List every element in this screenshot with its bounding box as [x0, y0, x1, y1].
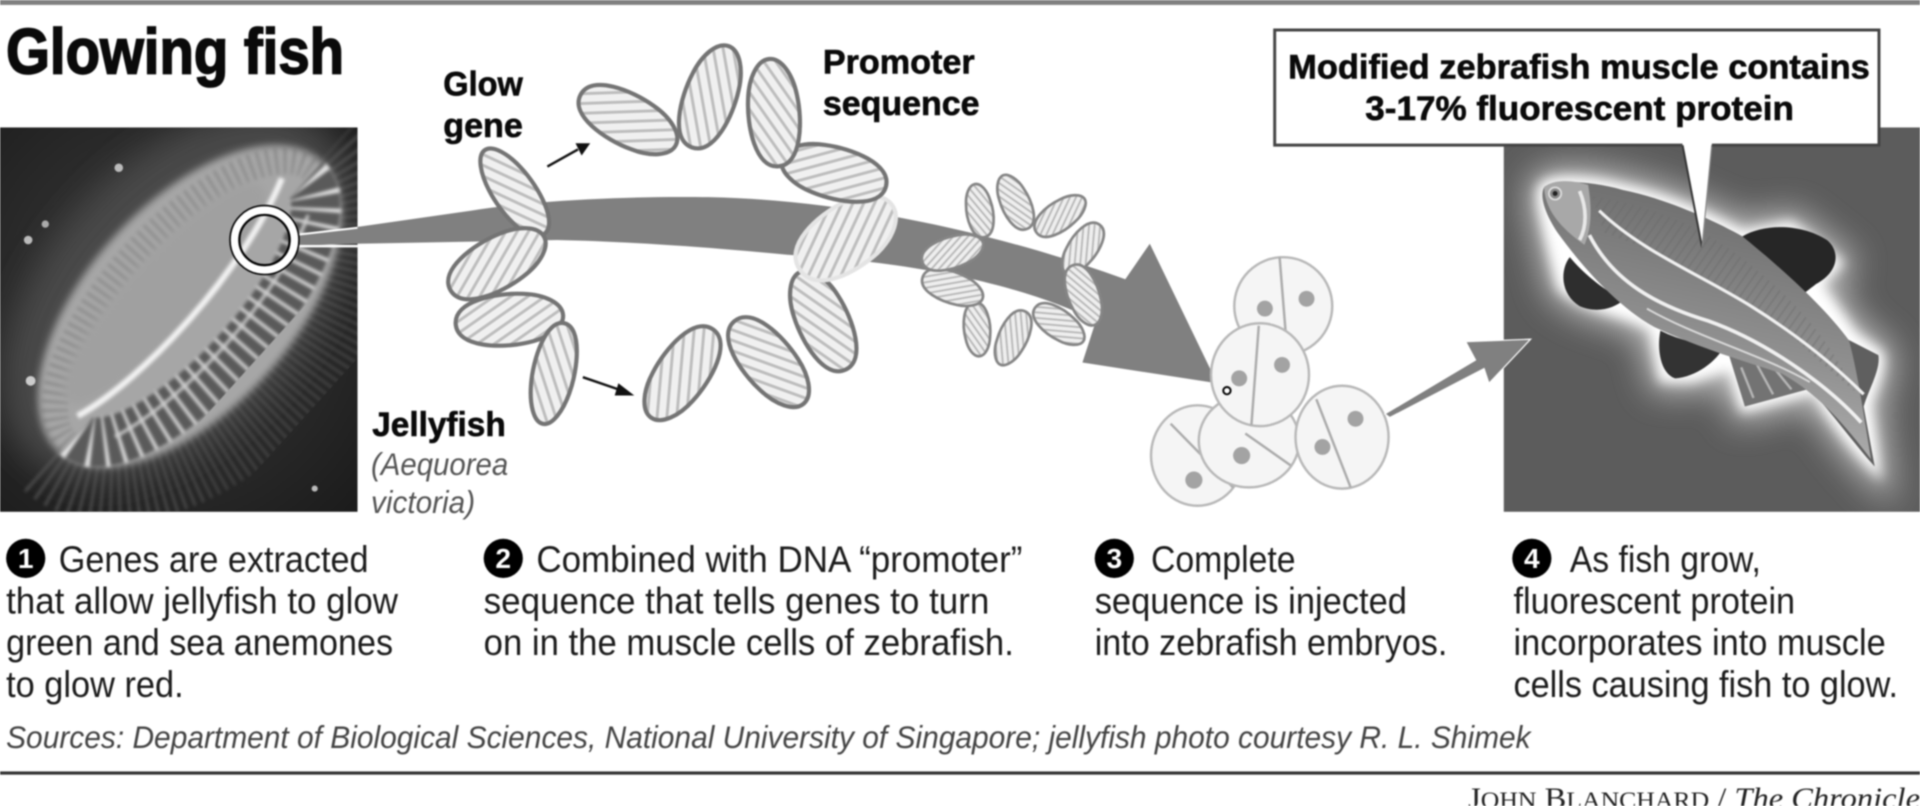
label: promoter sequence: sequence — [823, 85, 980, 123]
step 1 text: that allow jellyfish to glow — [6, 580, 398, 621]
icon: fish tail — [1823, 340, 1880, 466]
label: glow gene: Glow — [443, 66, 523, 104]
source line: Sources: Department of Biological Sciences, National University of Singapore; jellyfish photo courtesy R. L. Shimek — [6, 719, 1533, 755]
step 2 text: sequence that tells genes to turn — [484, 580, 989, 621]
label: jellyfish species: (Aequorea — [371, 446, 508, 482]
panel: glowing zebrafish — [1504, 127, 1920, 512]
diagram: small DNA plasmid — [917, 169, 1111, 371]
bottom rule — [0, 771, 1920, 775]
arrow: main gene transfer band — [291, 197, 1217, 383]
label: jellyfish species: Jellyfish — [372, 406, 506, 444]
label: promoter sequence — [823, 43, 980, 123]
step 4 text: cells causing fish to glow. — [1513, 664, 1898, 705]
step 4 text: 4 — [1524, 543, 1540, 574]
top bar — [0, 0, 1920, 5]
step 1 text: to glow red. — [6, 664, 184, 705]
diagram: large DNA plasmid — [438, 37, 910, 432]
icon: target circle on jellyfish — [230, 206, 358, 274]
step 1 text: green and sea anemones — [6, 622, 393, 663]
step 1 text — [6, 539, 398, 705]
title: Glowing fish — [6, 16, 344, 87]
icon: fish fins — [1563, 227, 1836, 407]
step 2 text: on in the muscle cells of zebrafish. — [484, 622, 1014, 663]
step 2 text: 2 — [495, 543, 511, 574]
step 3 text: sequence is injected — [1095, 580, 1407, 621]
callout: fluorescent protein: 3-17% fluorescent protein — [1365, 90, 1794, 128]
panel: jellyfish photo — [0, 126, 359, 513]
arrow: embryos to fish — [1385, 339, 1531, 418]
label: glow gene: gene — [443, 107, 523, 145]
step 3 text: Complete — [1151, 539, 1296, 580]
step 1 text: Genes are extracted — [59, 539, 369, 580]
step 4 text: As fish grow, — [1570, 539, 1761, 580]
diagram: zebrafish embryo cells — [1151, 257, 1389, 506]
callout: fluorescent protein — [1275, 30, 1879, 247]
step 2 text: Combined with DNA “promoter” — [536, 539, 1022, 580]
step 3 text — [1095, 539, 1447, 663]
icon: fish head — [1544, 181, 1591, 245]
step 4 text — [1512, 539, 1898, 705]
arrow: insertion lower — [583, 377, 634, 396]
step 3 text: into zebrafish embryos. — [1095, 622, 1447, 663]
step 3 text: 3 — [1106, 543, 1122, 574]
label: jellyfish species — [371, 406, 508, 520]
arrow: insertion upper — [547, 143, 590, 167]
step 4 text: fluorescent protein — [1513, 580, 1795, 621]
icon: fish stripes — [1589, 211, 1864, 422]
label: jellyfish species: victoria) — [371, 484, 475, 520]
step 2 text — [484, 539, 1022, 663]
label: promoter sequence: Promoter — [823, 43, 975, 81]
callout: fluorescent protein: Modified zebrafish muscle contains — [1288, 48, 1870, 86]
step 4 text: incorporates into muscle — [1513, 622, 1886, 663]
label: glow gene — [443, 66, 523, 145]
step 1 text: 1 — [18, 543, 34, 574]
icon: fish body — [1542, 182, 1871, 459]
